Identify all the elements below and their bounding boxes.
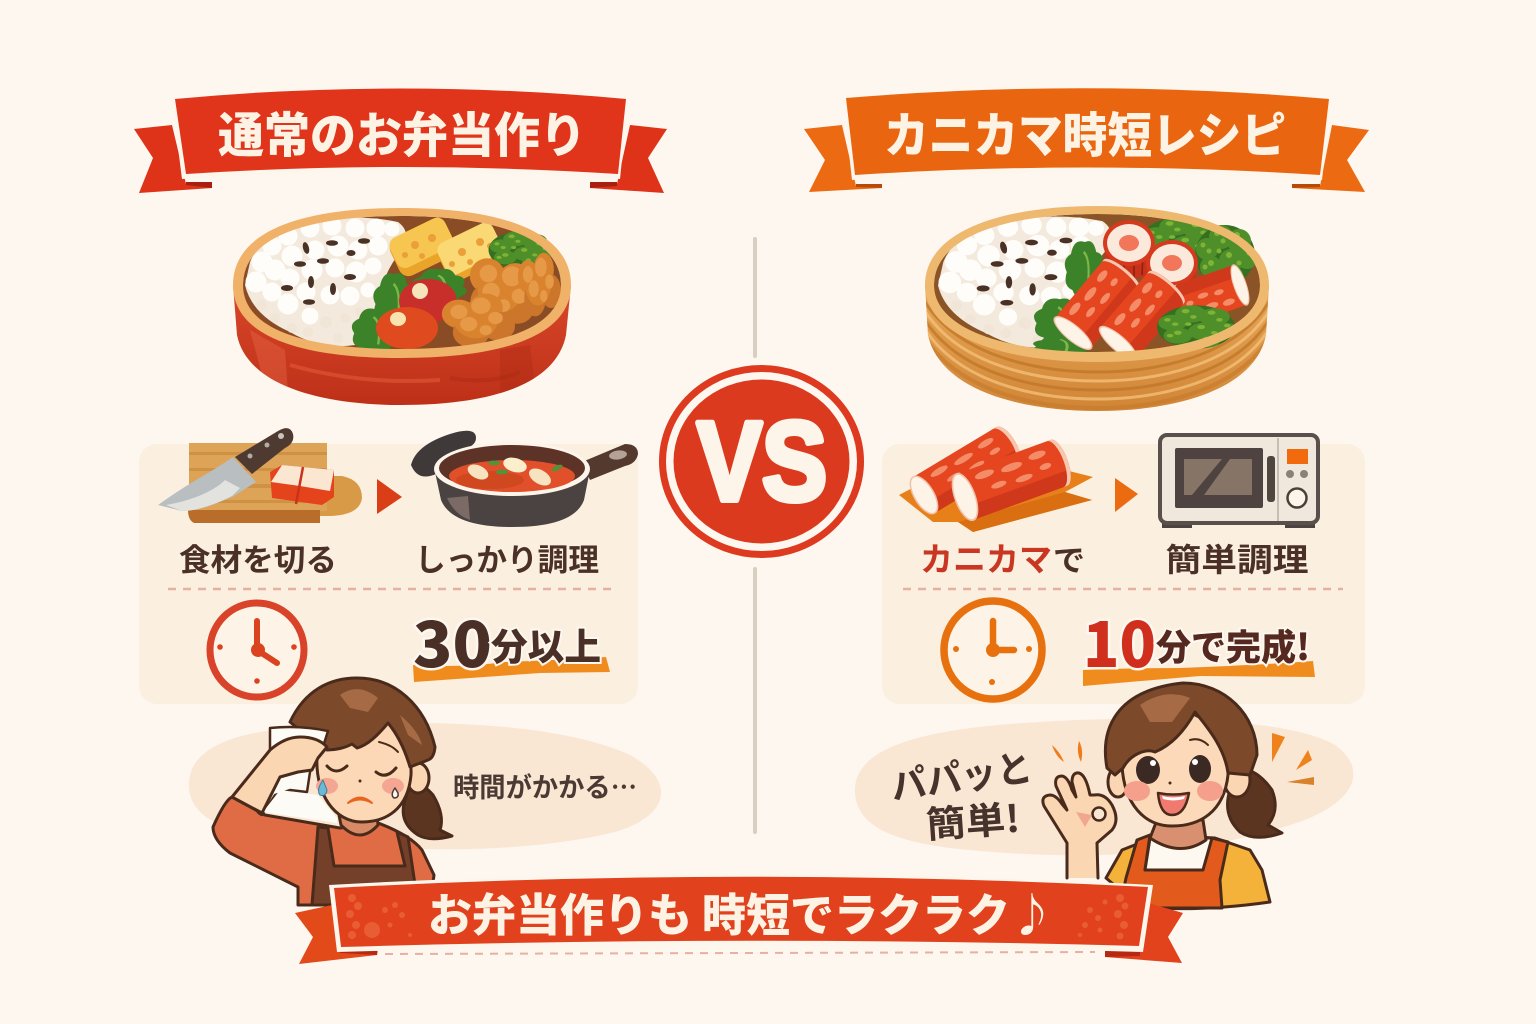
- brush underline: left time: [413, 657, 610, 682]
- mouth: [348, 798, 372, 803]
- eyes: [1136, 755, 1211, 784]
- icon: clock 30 minutes: [210, 603, 304, 697]
- bubble text: takes time: 時間がかかる…: [453, 766, 637, 805]
- right ribbon heading: [804, 88, 1369, 192]
- character: happy woman: [1043, 683, 1314, 909]
- tamagoyaki: [386, 215, 508, 285]
- ribbon slogan: お弁当作りも 時短でラクラク♪: [428, 879, 1054, 944]
- ribbon texture right: [1078, 894, 1128, 940]
- arrow: left step: [377, 479, 402, 514]
- icon: microwave: [1160, 435, 1318, 528]
- bubble text: quick and easy: [887, 737, 1035, 849]
- ear: [407, 763, 429, 793]
- OK hand: [1043, 773, 1116, 878]
- face: [317, 712, 411, 822]
- forearm and hand: [232, 737, 327, 813]
- kanikama block: [270, 465, 334, 505]
- icon: frying pan with stew: [411, 431, 638, 527]
- brush underline: right time: [1083, 661, 1315, 686]
- icon: kanikama on bamboo leaf: [899, 423, 1093, 532]
- hair: [1105, 683, 1257, 775]
- tomatoes: [376, 279, 457, 349]
- left ribbon title: 通常のお弁当作り: [218, 96, 586, 166]
- step label: cook thoroughly: しっかり調理: [415, 535, 599, 580]
- karaage: [442, 246, 561, 348]
- tears: [319, 780, 327, 795]
- left dashed divider: [168, 588, 615, 590]
- apron: [312, 827, 418, 905]
- bento rim: [925, 206, 1269, 362]
- icon: kanikama bento box: [925, 206, 1269, 411]
- time: done in 10 minutes: 分で完成!: [1156, 619, 1310, 671]
- broccoli back: [1141, 218, 1257, 285]
- time: done in 10 minutes: 10: [1083, 595, 1156, 685]
- step label: with kanikama: で: [1053, 536, 1085, 580]
- ponytail: [403, 784, 452, 839]
- left ribbon heading: [134, 88, 667, 193]
- broccoli front: [1157, 305, 1238, 349]
- cheeks: [1124, 781, 1223, 801]
- time: 30 minutes or more: [413, 595, 601, 685]
- VS text: VS: [697, 399, 827, 524]
- torso: [1106, 835, 1270, 909]
- torso and shirt: [213, 797, 434, 905]
- towel: [256, 727, 328, 815]
- right ribbon title: カニカマ時短レシピ: [884, 96, 1286, 166]
- icon: regular bento box: [233, 208, 571, 405]
- right dashed divider: [903, 588, 1343, 590]
- character: tired woman: [213, 678, 452, 905]
- step label: cut ingredients: 食材を切る: [179, 535, 337, 580]
- VS badge: [662, 368, 860, 554]
- broccoli: [488, 231, 554, 269]
- lettuce: [352, 269, 467, 355]
- crab sticks: [1050, 254, 1253, 364]
- icon: clock 10 minutes: [944, 601, 1042, 699]
- neck: [1150, 820, 1206, 849]
- step label: easy cooking: 簡単調理: [1166, 535, 1308, 581]
- apron: [1120, 835, 1228, 908]
- icon: knife on cutting board: [158, 428, 362, 523]
- lettuce: [1033, 241, 1105, 356]
- bento rim: [233, 208, 571, 358]
- speech bubble: right: [855, 719, 1353, 855]
- ears: [1108, 763, 1250, 797]
- speech bubble: left: [189, 723, 661, 849]
- bubble text: quick and easy: パパッと: [887, 737, 1035, 811]
- hair: [290, 678, 435, 767]
- time: 30 minutes or more: 分以上: [491, 617, 601, 671]
- panel: left steps background: [139, 444, 638, 704]
- bubble text: quick and easy: 簡単!: [924, 789, 1022, 849]
- bottom dashed line: [385, 952, 1095, 954]
- face: [1122, 712, 1228, 826]
- cheeks: [316, 778, 404, 794]
- step label: with kanikama: カニカマ: [920, 533, 1052, 581]
- smiling mouth: [1158, 793, 1189, 815]
- ribbon texture left: [346, 894, 412, 939]
- ponytail: [1228, 768, 1282, 837]
- panel: right steps background: [882, 444, 1365, 704]
- bottom ribbon: [295, 874, 1183, 964]
- white shirt collar: [1145, 838, 1212, 870]
- time: 30 minutes or more: 30: [413, 595, 492, 685]
- center divider: [753, 237, 757, 834]
- sushi rolls: [1103, 220, 1155, 279]
- time: done in 10 minutes: [1083, 595, 1310, 685]
- eyes and brows: [327, 742, 398, 775]
- arrow: right step: [1115, 478, 1138, 512]
- sparkle lines: [1052, 733, 1314, 785]
- neck: [339, 815, 378, 835]
